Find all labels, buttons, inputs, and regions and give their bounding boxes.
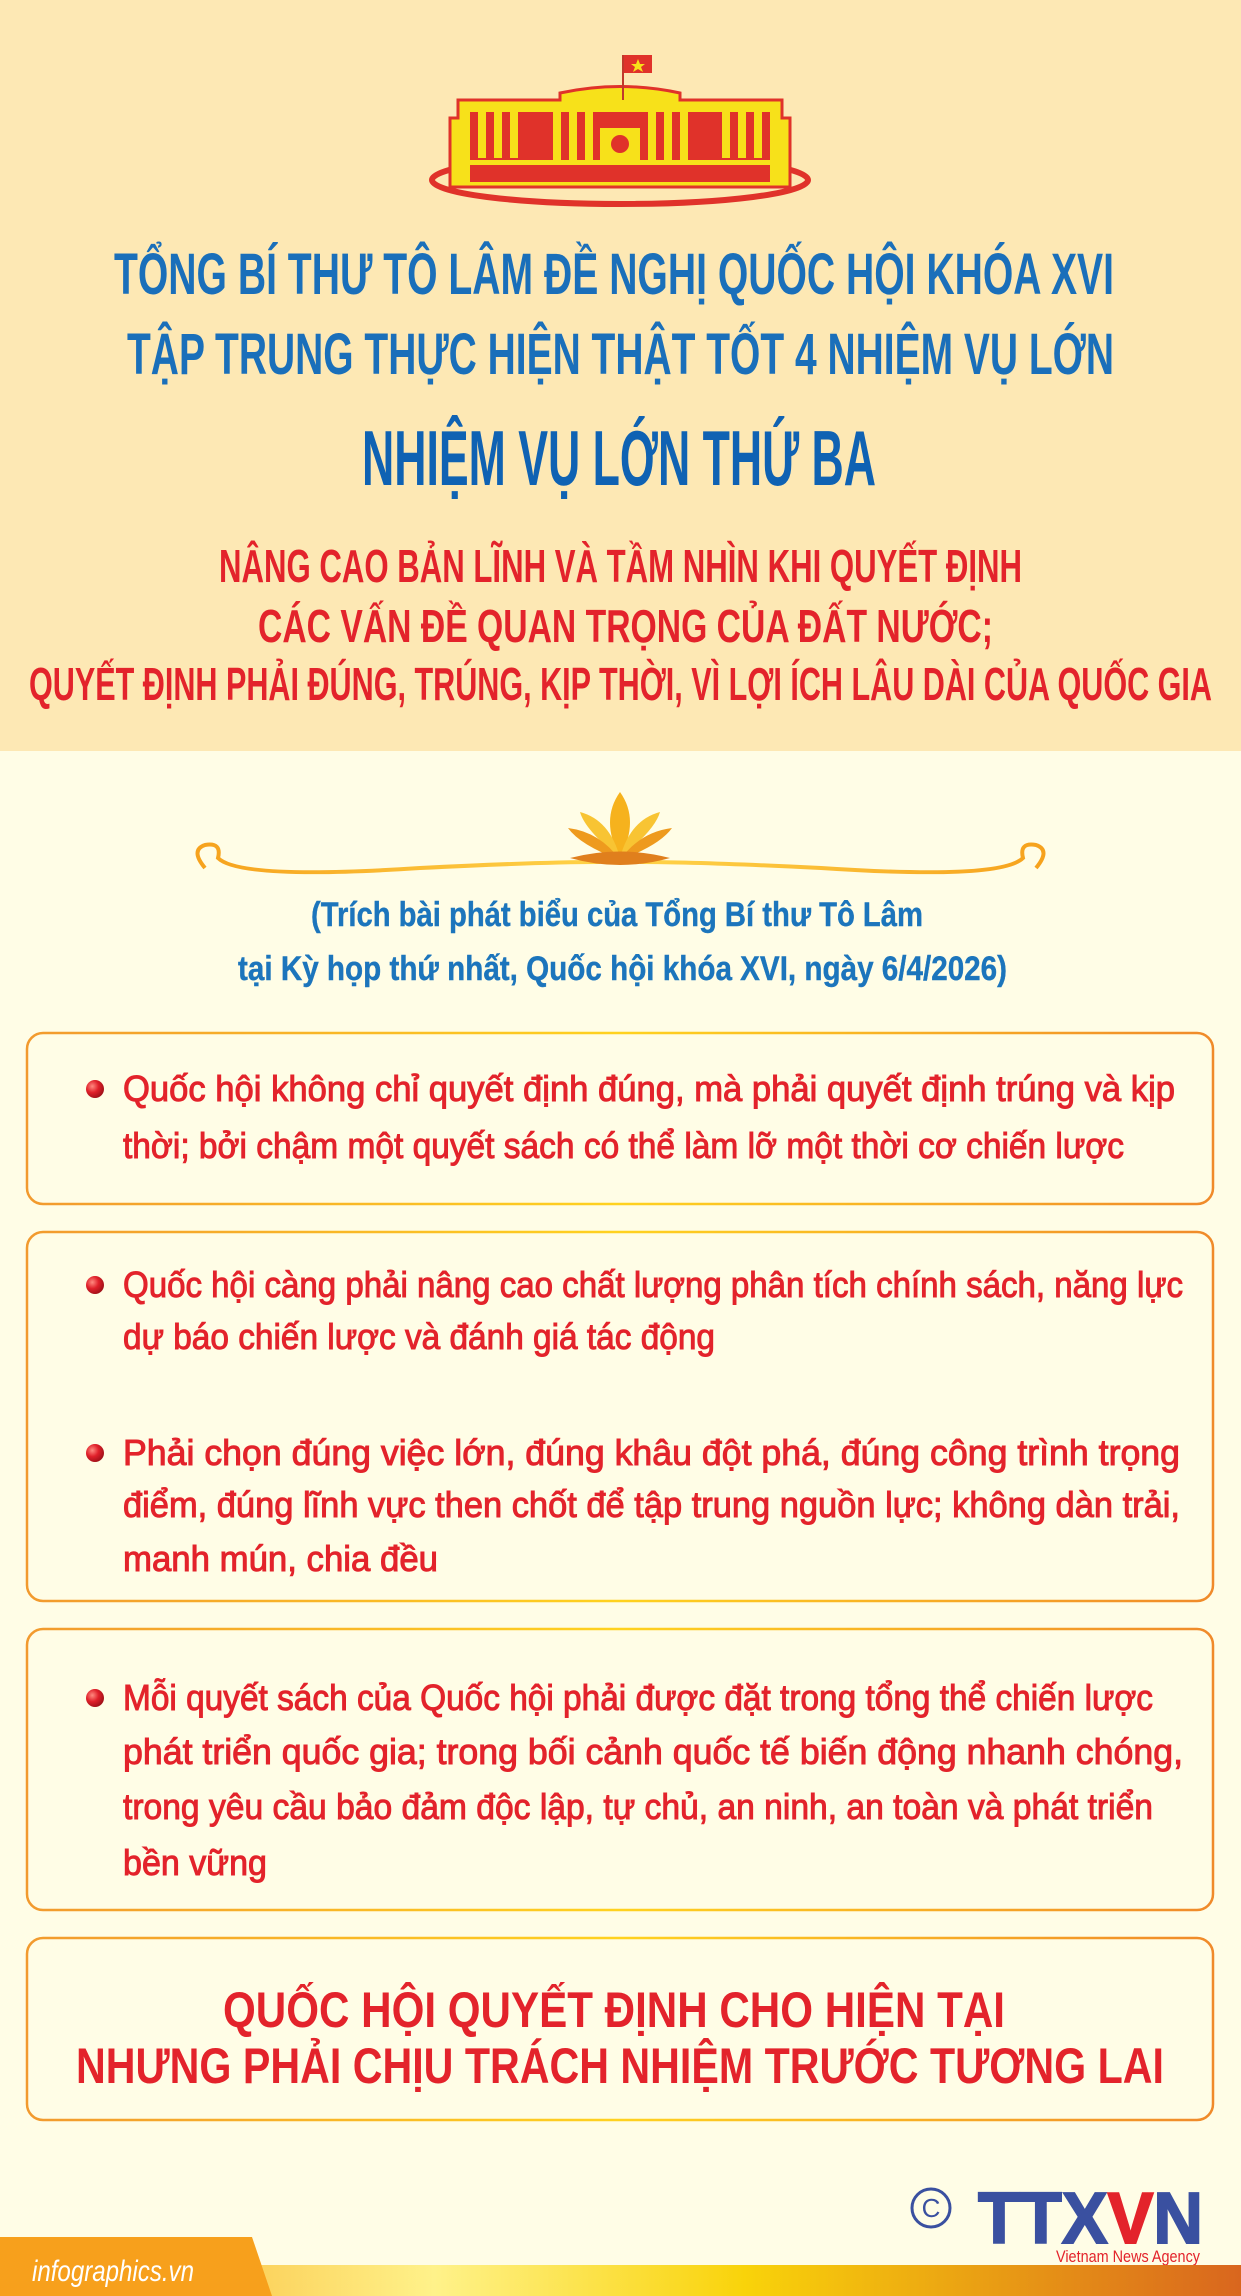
logo: TTXVN: C — [922, 2193, 940, 2223]
panel: box 3: trong yêu cầu bảo đảm độc lập, tự chủ, an ninh, an toàn và phát triển — [123, 1786, 1153, 1827]
panel: box 1 — [27, 1033, 1213, 1204]
subtitle red — [29, 540, 1212, 710]
quote source — [238, 896, 1007, 988]
panel: conclusion box — [27, 1938, 1213, 2120]
panel: box 1: Quốc hội không chỉ quyết định đúng, mà phải quyết định trúng và kịp — [123, 1068, 1175, 1109]
title — [114, 242, 1114, 387]
quote source: tại Kỳ họp thứ nhất, Quốc hội khóa XVI, ngày 6/4/2026) — [238, 950, 1007, 988]
panel: box 1: thời; bởi chậm một quyết sách có thể làm lỡ một thời cơ chiến lược — [123, 1125, 1124, 1166]
panel: box 2: Phải chọn đúng việc lớn, đúng khâu đột phá, đúng công trình trọng — [123, 1432, 1180, 1473]
panel: box 3 — [27, 1629, 1213, 1910]
bullet 1 — [86, 1080, 104, 1098]
panel: box 3: bền vững — [123, 1842, 267, 1883]
panel: conclusion box: QUỐC HỘI QUYẾT ĐỊNH CHO HIỆN TẠI — [223, 1981, 1005, 2038]
footer bar — [0, 2237, 1241, 2296]
quote source: (Trích bài phát biểu của Tổng Bí thư Tô Lâm — [311, 896, 923, 934]
heading: nhiem vu lon thu ba: NHIỆM VỤ LỚN THỨ BA — [362, 414, 876, 502]
panel: box 2 — [27, 1232, 1213, 1601]
header background — [0, 0, 1241, 751]
panel: box 3: phát triển quốc gia; trong bối cảnh quốc tế biến động nhanh chóng, — [123, 1731, 1183, 1772]
panel: box 2: điểm, đúng lĩnh vực then chốt để tập trung nguồn lực; không dàn trải, — [123, 1484, 1180, 1525]
bullet 3 — [86, 1444, 104, 1462]
subtitle red: CÁC VẤN ĐỀ QUAN TRỌNG CỦA ĐẤT NƯỚC; — [258, 600, 993, 652]
bullet 4 — [86, 1689, 104, 1707]
logo: TTXVN: TTXVN — [978, 2179, 1203, 2259]
panel: box 2: dự báo chiến lược và đánh giá tác động — [123, 1316, 715, 1357]
footer bar: infographics.vn — [32, 2255, 194, 2288]
panel: box 2: manh mún, chia đều — [123, 1538, 438, 1579]
icon: lotus ornament — [198, 792, 1044, 872]
bullet 2 — [86, 1276, 104, 1294]
logo: TTXVN: Vietnam News Agency — [1056, 2247, 1200, 2266]
icon: national assembly building — [432, 55, 808, 204]
panel: box 3: Mỗi quyết sách của Quốc hội phải được đặt trong tổng thể chiến lược — [123, 1677, 1153, 1718]
